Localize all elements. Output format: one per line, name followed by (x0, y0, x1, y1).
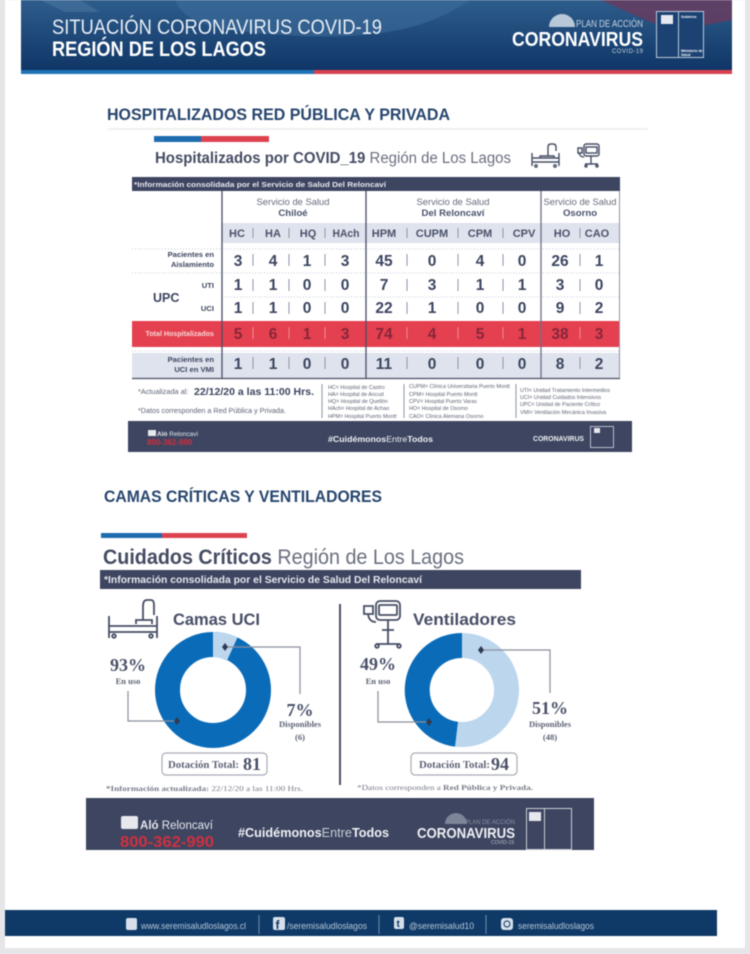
row: pacientes en aislamiento: 4 (269, 253, 278, 270)
row: UTI: 0 (303, 277, 311, 294)
footer strip of panel: CORONAVIRUS (417, 826, 515, 842)
row: total hospitalizados (234, 326, 604, 343)
bottom social bar (5, 910, 717, 936)
update note: *Actualizada al: (138, 387, 188, 396)
row: total hospitalizados: 3 (595, 326, 604, 343)
legend: hospital abbreviations: CPV= Hospital Puerto Varas (409, 399, 477, 405)
dotacion total: Dotación Total: (168, 760, 239, 771)
hospital column headers: HC (229, 228, 245, 240)
service headers: Chiloé (278, 208, 308, 219)
note: *Datos corresponden a Red Pública y Privada. (357, 783, 533, 792)
stat: 7% disponibles: (6) (295, 732, 305, 742)
hospital column headers: CPV (513, 228, 536, 240)
twitter link (394, 917, 474, 931)
icon: hospital bed (532, 144, 559, 167)
row: UCI: 0 (341, 300, 349, 317)
row: UTI: 1 (476, 277, 485, 294)
legend: hospital abbreviations: HA= Hospital de Ancud (328, 392, 384, 398)
footer strip of panel: 800-362-990 (120, 834, 214, 851)
row: pacientes en aislamiento: 45 (375, 253, 393, 270)
row labels (146, 250, 214, 374)
hospital column headers (229, 228, 610, 240)
dotacion total: 81 (243, 754, 261, 774)
service headers: Servicio de Salud (417, 196, 489, 207)
stat: 7% disponibles (279, 700, 322, 742)
legend: hospital abbreviations (322, 384, 610, 420)
hospital column headers: HO (554, 228, 571, 240)
section heading: camas criticas: CAMAS CRÍTICAS Y VENTILADORES (104, 487, 382, 506)
row: total hospitalizados: 5 (234, 326, 243, 343)
footer strip of table: 800-362-990 (147, 438, 193, 447)
facebook link: /seremisaludloslagos (287, 921, 367, 931)
label: Camas UCI (173, 610, 260, 629)
legend: hospital abbreviations: UCI= Unidad Cuidados Intensivos (520, 395, 601, 401)
banner logo: plan de accion coronavirus: CORONAVIRUS (512, 29, 643, 51)
dotacion total: Dotación Total: (419, 760, 490, 771)
stat: 51% disponibles: 51% (532, 698, 568, 718)
row: pacientes en aislamiento: 1 (595, 253, 604, 270)
update note: 22/12/20 a las 11:00 Hrs. (194, 386, 314, 398)
stat: 51% disponibles (529, 698, 572, 742)
row labels: Total Hospitalizados (146, 330, 214, 338)
note: *Información actualizada: 22/12/20 a las 11:00 Hrs. (106, 784, 303, 793)
stat: 49% en uso: En uso (366, 676, 390, 686)
subpanel: camas UCI (106, 600, 322, 793)
row: UCI en VMI: 8 (556, 356, 565, 373)
legend: hospital abbreviations: VMI= Ventilación Mecánica Invasiva (520, 410, 606, 416)
row: UCI: 0 (476, 300, 484, 317)
header banner (21, 0, 732, 74)
row: pacientes en aislamiento (234, 253, 604, 270)
subpanel: ventiladores (357, 601, 572, 792)
banner title: SITUACIÓN CORONAVIRUS COVID-19 (52, 16, 382, 39)
hospital column headers: CUPM (416, 228, 448, 240)
row: total hospitalizados: 38 (551, 326, 569, 343)
icon: ventilator (364, 601, 401, 648)
row: pacientes en aislamiento: 0 (518, 253, 526, 270)
hospital column headers: CAO (585, 228, 610, 240)
service headers: Osorno (563, 208, 597, 219)
stat: 93% en uso: 93% (110, 655, 146, 675)
row: UCI: 1 (428, 300, 437, 317)
row labels: Pacientes en (168, 355, 214, 364)
row labels: UCI (201, 304, 214, 313)
footer strip of table (128, 421, 632, 452)
hospital column headers: CPM (468, 228, 492, 240)
row: pacientes en aislamiento: 0 (428, 253, 436, 270)
row: UTI: 1 (234, 277, 243, 294)
footer strip of panel (86, 798, 594, 851)
banner title (52, 16, 382, 61)
banner logo: ministerio de salud: Ministerio de (681, 49, 703, 53)
row: pacientes en aislamiento: 3 (234, 253, 243, 270)
leader lines (128, 643, 300, 725)
row: UCI en VMI: 0 (428, 356, 436, 373)
row: total hospitalizados: 4 (428, 326, 437, 343)
row: UCI: 2 (595, 300, 603, 317)
row: UCI en VMI: 0 (341, 356, 349, 373)
legend: hospital abbreviations: HAch= Hospital de Achao (328, 406, 389, 412)
stat: 7% disponibles: 7% (286, 700, 314, 720)
row: total hospitalizados: 3 (341, 326, 350, 343)
row labels: UPC (153, 291, 179, 305)
legend: hospital abbreviations: CPM= Hospital Puerto Montt (409, 392, 478, 398)
stat: 51% disponibles: Disponibles (529, 719, 572, 729)
row: total hospitalizados: 6 (269, 326, 278, 343)
row: UTI: 3 (428, 277, 437, 294)
row: UCI en VMI: 0 (476, 356, 484, 373)
banner logo: plan de accion coronavirus: COVID-19 (612, 49, 644, 55)
row: UTI (234, 277, 603, 294)
hospital column headers: HPM (372, 228, 396, 240)
service headers (257, 196, 616, 219)
stat: 49% en uso (360, 654, 396, 686)
panel title: Cuidados Críticos Región de Los Lagos (103, 546, 464, 569)
table title: Hospitalizados por COVID_19 Región de Los Lagos (155, 150, 511, 167)
row: UCI en VMI: 1 (269, 356, 278, 373)
row: UCI: 1 (234, 300, 243, 317)
banner logo: ministerio de salud (656, 11, 704, 58)
hospital column headers: HQ (300, 228, 317, 240)
web link (126, 918, 246, 931)
footer strip of table: CORONAVIRUS (533, 434, 584, 443)
row: UTI: 1 (269, 277, 278, 294)
row: total hospitalizados: 1 (303, 326, 312, 343)
banner logo: plan de accion coronavirus: PLAN DE ACCIÓN (576, 17, 643, 30)
info bar (100, 570, 581, 589)
banner title: REGIÓN DE LOS LAGOS (52, 37, 266, 61)
row: UCI en VMI: 0 (518, 356, 526, 373)
row: UCI: 9 (556, 300, 565, 317)
banner logo: ministerio de salud: Salud (681, 53, 691, 57)
stat: 7% disponibles: Disponibles (279, 719, 322, 729)
row: UCI en VMI: 1 (234, 356, 243, 373)
row: UTI: 7 (380, 277, 388, 294)
row labels: Aislamiento (171, 260, 214, 269)
row: pacientes en aislamiento: 4 (476, 253, 485, 270)
panel: cuidados criticos (86, 533, 594, 851)
stat: 51% disponibles: (48) (543, 732, 557, 742)
info bar: *Información consolidada por el Servicio de Salud Del Reloncaví (134, 180, 387, 189)
row labels: UCI en VMI (174, 365, 214, 374)
row: total hospitalizados: 5 (476, 326, 485, 343)
panel: hospitalizados table (128, 136, 632, 452)
row: UCI en VMI (234, 356, 603, 373)
row: UTI: 3 (556, 277, 565, 294)
row: UCI: 1 (269, 300, 278, 317)
instagram link: seremisaludloslagos (518, 921, 594, 931)
donut chart: camas UCI 93 / 7 (168, 632, 258, 736)
accent bar (154, 136, 269, 142)
leader lines (378, 646, 550, 726)
footer strip of panel: PLAN DE ACCIÓN (465, 819, 515, 826)
facebook link: f (276, 918, 280, 932)
row: UCI: 0 (303, 300, 311, 317)
row: UTI: 0 (341, 277, 349, 294)
icon: bed (109, 600, 157, 638)
info bar (132, 177, 620, 191)
service headers: Servicio de Salud (257, 196, 329, 207)
row: UCI (234, 300, 603, 317)
row: UTI: 1 (518, 277, 527, 294)
footer strip of panel: #CuidémonosEntreTodos (238, 826, 389, 840)
legend: hospital abbreviations: HQ= Hospital de Quellón (328, 399, 388, 405)
dotacion total: 94 (491, 754, 509, 774)
row: pacientes en aislamiento: 26 (551, 253, 569, 270)
legend: hospital abbreviations: HO= Hospital de Osorno (409, 406, 468, 412)
dotacion total (162, 753, 267, 775)
stat: 93% en uso (110, 655, 146, 686)
section heading: hospitalizados: HOSPITALIZADOS RED PÚBLICA Y PRIVADA (107, 105, 450, 124)
dotacion total (411, 753, 517, 775)
row labels: Pacientes en (168, 250, 214, 259)
hospital column headers: HA (265, 228, 281, 240)
row: UCI en VMI: 11 (376, 356, 393, 373)
legend: hospital abbreviations: CAO= Clínica Alemana Osorno (409, 414, 483, 420)
donut chart: ventiladores 49 / 51 (405, 633, 506, 747)
table bands (132, 223, 619, 378)
row: UCI: 22 (375, 300, 393, 317)
row: UCI en VMI: 2 (595, 356, 603, 373)
twitter link: @seremisalud10 (409, 921, 474, 931)
row: total hospitalizados: 74 (375, 326, 393, 343)
row: UTI: 0 (595, 277, 603, 294)
banner logo: ministerio de salud: Gobierno (681, 15, 697, 19)
footer strip of panel: COVID-19 (491, 840, 514, 846)
instagram link (501, 918, 594, 931)
service headers: Del Reloncaví (422, 208, 485, 219)
legend: hospital abbreviations: UTI= Unidad Tratamiento Intermedios (520, 388, 610, 394)
label: Ventiladores (413, 610, 516, 629)
footer strip of table: Aló Reloncaví (157, 431, 198, 438)
accent bar (101, 533, 247, 538)
web link: www.seremisaludloslagos.cl (140, 921, 246, 931)
service headers: Servicio de Salud (544, 196, 616, 207)
hospital column headers: HAch (332, 228, 360, 240)
icon: ventilator (578, 144, 599, 167)
row: pacientes en aislamiento: 1 (303, 253, 312, 270)
stat: 93% en uso: En uso (116, 676, 140, 686)
facebook link (273, 917, 367, 932)
legend: hospital abbreviations: HC= Hospital de Castro (328, 385, 385, 391)
banner logo: plan de accion coronavirus (512, 14, 644, 55)
legend: hospital abbreviations: CUPM= Clínica Universitaria Puerto Montt (409, 384, 510, 390)
row: UCI: 0 (518, 300, 526, 317)
footer strip of table: #Cuidémonos EntreTodos (328, 435, 434, 444)
row: UCI en VMI: 0 (303, 356, 311, 373)
twitter link: t (396, 919, 400, 930)
info bar: *Información consolidada por el Servicio de Salud Del Reloncaví (104, 575, 423, 586)
legend: hospital abbreviations: HPM= Hospital Puerto Montt (328, 414, 397, 420)
row: total hospitalizados: 1 (518, 326, 527, 343)
row labels: UTI (202, 281, 214, 290)
legend: hospital abbreviations: UPC= Unidad de Paciente Crítico (520, 402, 600, 408)
update note (138, 386, 314, 415)
row: pacientes en aislamiento: 3 (341, 253, 350, 270)
footer strip of panel: Aló Reloncaví (140, 820, 214, 832)
stat: 49% en uso: 49% (360, 654, 396, 674)
update note: *Datos corresponden a Red Pública y Privada. (138, 408, 286, 415)
